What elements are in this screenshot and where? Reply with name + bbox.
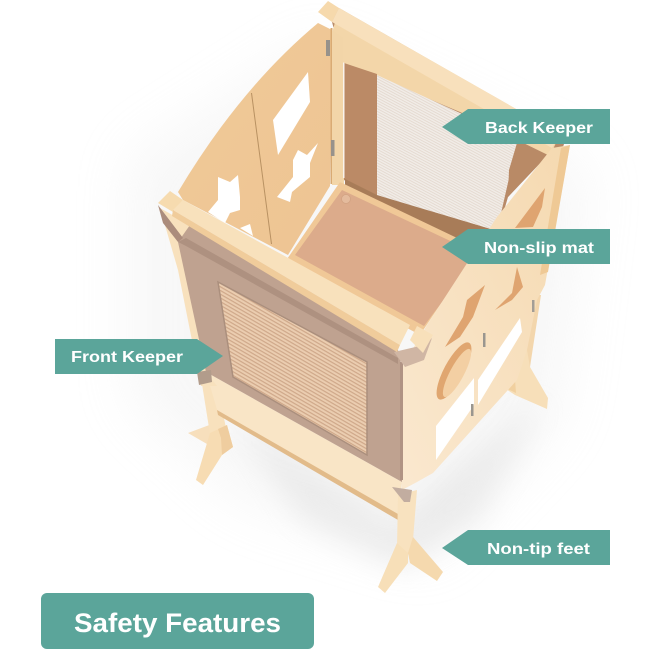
learning tower product: [158, 1, 570, 593]
label: Non-slip mat: Non-slip mat: [484, 240, 594, 257]
front left leg: [202, 384, 226, 434]
left front post: [160, 208, 217, 386]
title: Safety Features: [41, 593, 314, 649]
label: Non-tip feet: [442, 530, 610, 565]
right wall white windows: [436, 378, 474, 460]
right wall: [402, 145, 570, 490]
left wall window cutout: [273, 72, 310, 155]
front top rail: [158, 191, 433, 353]
back panel: [332, 8, 566, 247]
title: Safety Features: Safety Features: [74, 608, 281, 638]
front keeper mesh: [218, 282, 367, 455]
non-slip mat floor: [285, 182, 478, 335]
label: Non-slip mat: [442, 229, 610, 264]
left wall star cutouts: [208, 143, 318, 236]
front right leg: [397, 490, 417, 555]
label: Back Keeper: [442, 109, 610, 144]
label: Back Keeper: Back Keeper: [485, 120, 593, 137]
front right foot left toe: [378, 543, 408, 593]
label: Front Keeper: Front Keeper: [71, 349, 183, 366]
left wall folding panels: [178, 23, 343, 255]
back right leg and foot: [503, 295, 548, 409]
lower front wood panel: [206, 372, 402, 520]
back left foot: [188, 424, 213, 444]
front right foot right toe: [408, 537, 443, 581]
label: Non-tip feet: Non-tip feet: [487, 541, 590, 558]
right wall oval cutout: [430, 338, 478, 404]
front left foot: [196, 425, 233, 485]
right wall star cutouts: [445, 188, 545, 347]
top back corner post: [318, 1, 339, 22]
front keeper panel: [158, 205, 432, 502]
label: Front Keeper: [55, 339, 223, 374]
